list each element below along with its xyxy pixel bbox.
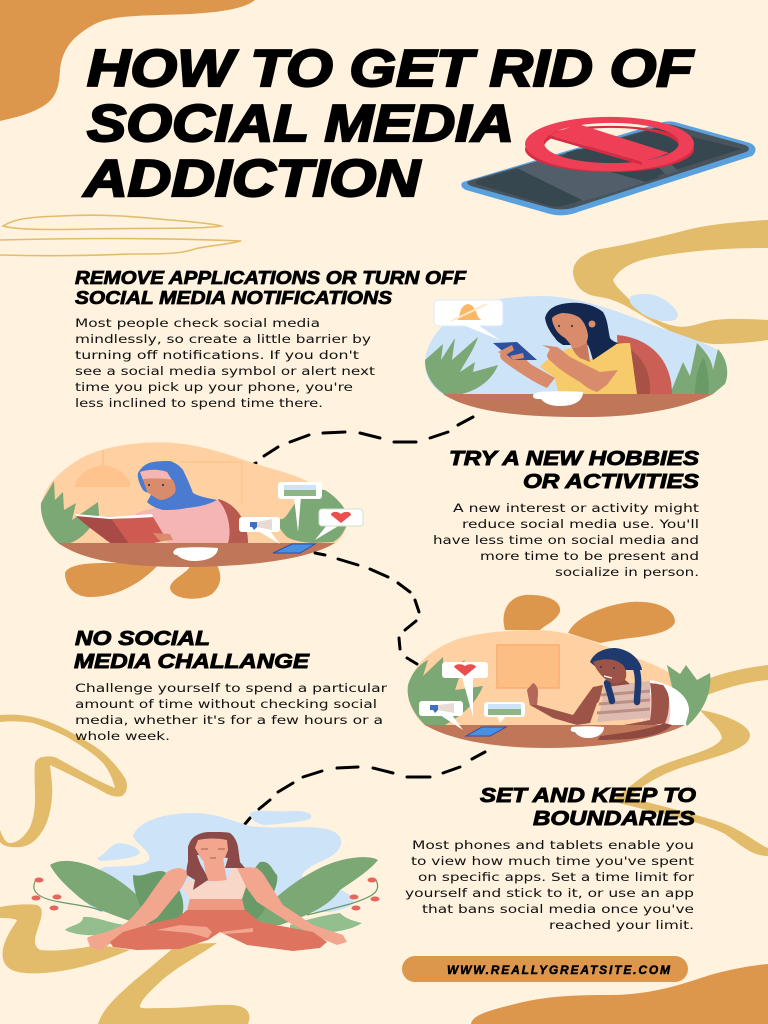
- phone: [466, 727, 506, 736]
- decorative squiggle: left gold: [0, 715, 127, 847]
- face: [552, 313, 588, 348]
- decorative blob: bottom right orange: [471, 964, 768, 1024]
- neck: [570, 342, 590, 362]
- website button: WWW.REALLYGREATSITE.COM: [447, 963, 671, 977]
- heading: MEDIA CHALLANGE: [74, 651, 310, 673]
- body text: turning off notifications. If you don't: [75, 348, 359, 362]
- face: [593, 659, 626, 683]
- braids: [607, 668, 638, 702]
- body text: reduce social media use. You'll: [462, 517, 699, 531]
- face: [143, 478, 176, 500]
- smile: [604, 676, 612, 678]
- bubble: megaphone: [419, 701, 463, 730]
- frame: [497, 645, 559, 688]
- title: ADDICTION: [82, 150, 422, 208]
- face features: [558, 325, 573, 327]
- body text: on specific apps. Set a time limit for: [418, 870, 694, 884]
- body text: less inclined to spend time there.: [75, 396, 323, 410]
- body text: amount of time without checking social: [75, 697, 377, 711]
- body text: see a social media symbol or alert next: [75, 364, 375, 378]
- feet: [157, 925, 253, 938]
- body text: more time to be present and: [480, 549, 699, 563]
- decorative blob: top left orange: [0, 0, 255, 121]
- phone: [493, 342, 537, 360]
- illustration: meditating woman: [32, 811, 380, 951]
- orange blobs: [504, 595, 675, 643]
- chair: [218, 499, 248, 543]
- body text: Challenge yourself to spend a particular: [75, 681, 387, 695]
- frame: [180, 462, 242, 505]
- body text: A new interest or activity might: [453, 501, 699, 515]
- neck: [203, 858, 227, 881]
- body text: [75, 681, 387, 743]
- body text: socialize in person.: [555, 565, 699, 579]
- title: [82, 40, 694, 208]
- left leaves: [41, 481, 99, 543]
- hand holding cup: [598, 723, 672, 740]
- hand: [153, 533, 173, 541]
- decorative band: right gold middle: [705, 665, 768, 696]
- body: [125, 500, 230, 543]
- connector: dashed line 1: [254, 417, 473, 464]
- body text: to view how much time you've spent: [411, 854, 694, 868]
- table: [425, 725, 685, 748]
- body text: whole week.: [75, 729, 170, 743]
- heading: TRY A NEW HOBBIES: [449, 448, 700, 470]
- right leaves: [667, 665, 710, 726]
- chair: [640, 680, 689, 726]
- illustration: woman reading a book: [41, 442, 363, 599]
- pants: [110, 910, 327, 951]
- body text: time you pick up your phone, you're: [75, 380, 353, 394]
- decorative band: right gold wave: [612, 710, 768, 856]
- heading: [74, 628, 310, 673]
- body text: yourself and stick to it, or use an app: [405, 886, 694, 900]
- blue cloud top: [250, 811, 311, 825]
- body text: [405, 838, 694, 932]
- top with stripes: [597, 681, 650, 722]
- lamp: [75, 450, 130, 487]
- closed eyes and mouth: [201, 849, 225, 858]
- big leaves: [50, 857, 378, 925]
- decorative blob: top right gold band: [573, 220, 768, 344]
- table: [58, 543, 335, 567]
- bubble: picture: [484, 702, 525, 723]
- chair: [617, 335, 672, 394]
- midriff: [187, 898, 245, 911]
- bubble: heart: [442, 662, 488, 717]
- cup: [173, 547, 218, 561]
- hijab: [138, 461, 217, 510]
- bubble: muted bell: [434, 300, 503, 340]
- blue background: [77, 813, 353, 912]
- left leaves: [425, 337, 498, 394]
- right leaves: [670, 343, 727, 394]
- shirt: [540, 343, 637, 394]
- body text: that bans social media once you've: [422, 902, 694, 916]
- decorative blob: light blue cloud top right: [629, 294, 678, 321]
- heading: OR ACTIVITIES: [523, 471, 700, 493]
- decorative outline scribbles: left gold: [0, 215, 241, 256]
- bubble: picture: [278, 482, 322, 532]
- heading: SOCIAL MEDIA NOTIFICATIONS: [75, 288, 392, 308]
- prohibition sign: [525, 117, 694, 172]
- body text: Most phones and tablets enable you: [412, 838, 694, 852]
- section 2: try a new hobbies: [433, 448, 700, 579]
- table: [443, 394, 713, 417]
- section 4: set and keep to boundaries: [405, 785, 697, 932]
- bubble: heart: [315, 509, 363, 540]
- title: SOCIAL MEDIA: [87, 95, 514, 153]
- right leaves: [277, 489, 348, 543]
- website button: [402, 956, 688, 982]
- raised arm: [527, 683, 603, 725]
- body text: mindlessly, so create a little barrier by: [75, 332, 371, 346]
- illustration: woman with raised hand: [408, 595, 710, 748]
- neck: [606, 680, 630, 687]
- inner scarf: [140, 470, 172, 480]
- body text: Most people check social media: [75, 316, 320, 330]
- arm holding phone: [500, 348, 555, 388]
- light leaves: [65, 913, 362, 935]
- face features: [148, 484, 164, 486]
- heading: [75, 268, 467, 308]
- bubble: megaphone: [239, 517, 280, 544]
- left leaves: [408, 657, 483, 725]
- body text: reached your limit.: [549, 918, 694, 932]
- section 3: no social media challange: [74, 628, 387, 743]
- hair: [187, 832, 245, 890]
- heading: [480, 785, 697, 830]
- illustration: woman with phone and muted bell: [425, 296, 727, 417]
- right arm: [237, 867, 347, 945]
- body text: [433, 501, 699, 579]
- dark leaves: [133, 862, 277, 925]
- body text: have less time on social media and: [433, 533, 699, 547]
- decorative blob: bottom gold: [98, 943, 249, 1024]
- heading: [449, 448, 700, 493]
- blue cloud left: [97, 843, 140, 861]
- cup: [571, 726, 604, 738]
- peach background: [408, 630, 690, 726]
- stems: [34, 880, 378, 915]
- body text: media, whether it's for a few hours or a: [75, 713, 383, 727]
- body text: [75, 316, 375, 410]
- top: [182, 868, 246, 899]
- right arm: [603, 683, 669, 735]
- phone: [273, 544, 315, 553]
- left arm: [87, 868, 190, 950]
- cup: [533, 391, 583, 406]
- orange blobs: [65, 563, 220, 599]
- icon: phone with prohibition sign: [461, 117, 756, 215]
- book: [75, 515, 167, 548]
- heading: SET AND KEEP TO: [480, 785, 697, 807]
- decorative blob: bottom left gold: [0, 904, 130, 973]
- connector: dashed line 2: [315, 553, 419, 664]
- face: [195, 838, 228, 864]
- heading: BOUNDARIES: [533, 808, 696, 830]
- peach background: [41, 442, 348, 543]
- hair: [545, 303, 618, 360]
- section 1: remove applications: [75, 268, 467, 410]
- title: HOW TO GET RID OF: [87, 40, 694, 98]
- heading: NO SOCIAL: [75, 628, 210, 650]
- connector: dashed line 3: [245, 752, 485, 824]
- heading: REMOVE APPLICATIONS OR TURN OFF: [75, 268, 467, 288]
- hair: [590, 648, 642, 670]
- berries: [32, 878, 380, 910]
- face features: [600, 666, 615, 669]
- pointing arm: [542, 345, 618, 392]
